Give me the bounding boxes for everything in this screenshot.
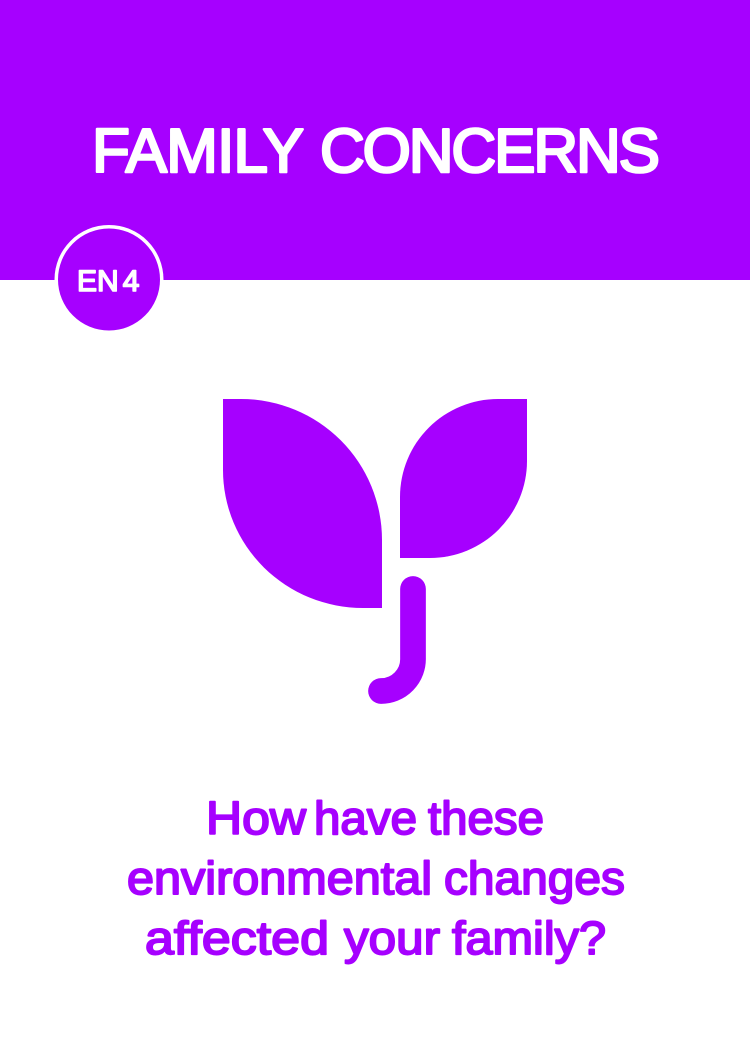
title <box>92 117 660 186</box>
badge: EN4 <box>54 225 164 336</box>
question text: How <box>206 792 307 844</box>
question text: these <box>428 792 544 844</box>
title: FAMILY <box>92 117 304 186</box>
question text: changes <box>444 852 625 904</box>
question text <box>127 792 625 964</box>
question text: affected <box>145 912 329 964</box>
icon: sprout <box>223 399 527 691</box>
question text: environmental <box>127 852 432 904</box>
badge: EN4: EN4 <box>77 265 139 298</box>
question text: family? <box>452 912 606 964</box>
title: CONCERNS <box>320 117 660 186</box>
header band <box>0 0 750 280</box>
question text: have <box>314 792 417 844</box>
right leaf <box>400 399 527 558</box>
left leaf <box>223 399 382 608</box>
stem <box>381 589 413 691</box>
question text: your <box>344 912 440 964</box>
